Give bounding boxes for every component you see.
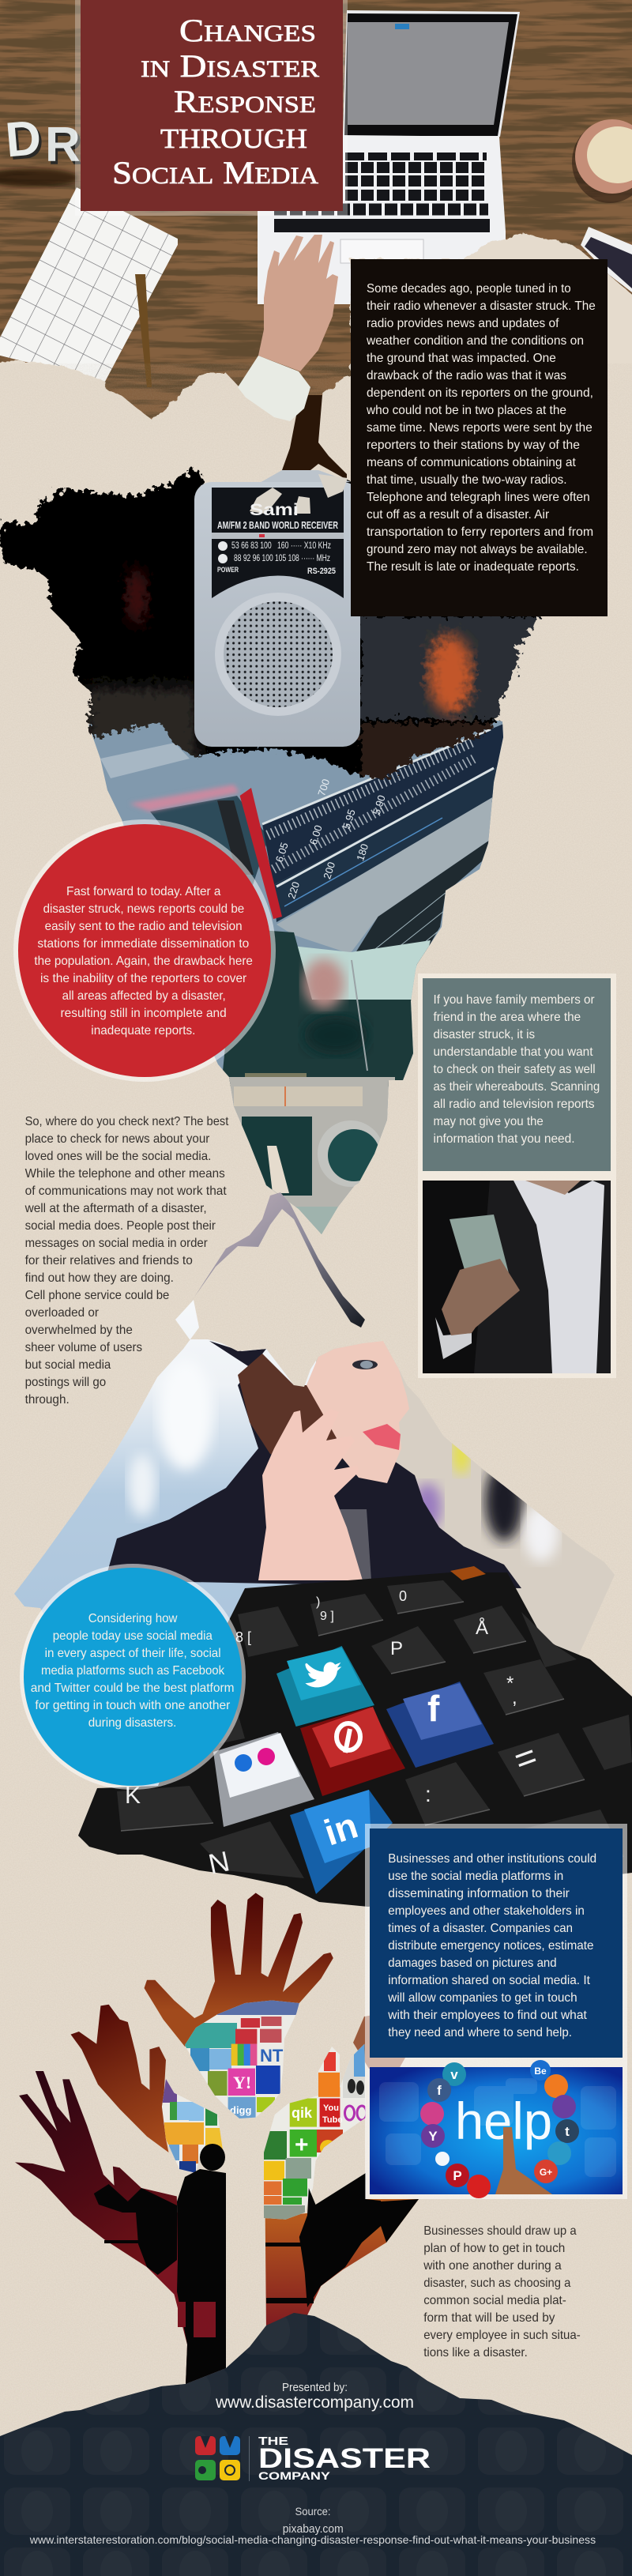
panel: businesses and institutions: damages based on pictures and xyxy=(388,1956,557,1970)
key rims xyxy=(121,1602,585,1831)
panel: radio history: The result is late or inadequate reports. xyxy=(367,560,579,574)
panel: red circle, fast forward: all areas affected by a disaster, xyxy=(62,989,226,1003)
panel: family members: all radio and television reports xyxy=(433,1098,595,1111)
panel: radio history: their radio whenever a disaster struck. The xyxy=(367,299,596,313)
key letters: = xyxy=(509,1734,543,1780)
illustration: reaching hands xyxy=(15,1893,419,2384)
panel: businesses and institutions: they need and where to send help. xyxy=(388,2026,572,2039)
panel: family members xyxy=(418,974,616,1378)
panel: businesses and institutions: times of a disaster. Companies can xyxy=(388,1922,573,1935)
icon letters: Be xyxy=(534,2066,547,2077)
text: businesses should draw up a plan: every employee in such situa- xyxy=(423,2329,581,2342)
panel: family members: understandable that you want xyxy=(433,1045,593,1059)
panel: businesses and institutions: Businesses and other institutions could xyxy=(388,1852,596,1866)
presented by xyxy=(215,2381,414,2412)
photo: wooden desk with laptop xyxy=(0,0,632,431)
title: Changes xyxy=(179,12,316,49)
icon letters: Y xyxy=(428,2129,438,2144)
key letters: ) xyxy=(316,1595,320,1609)
source: Source: xyxy=(295,2505,330,2518)
dial numbers: 5.95 xyxy=(340,808,358,830)
radio labels: Sami xyxy=(250,501,299,519)
icon letters: v xyxy=(450,2067,458,2082)
photo: keyboard with social media keys xyxy=(78,1566,632,1907)
logo xyxy=(195,2435,431,2482)
panel: radio history: Some decades ago, people tuned in to xyxy=(367,282,571,296)
text: businesses should draw up a plan: common social media plat- xyxy=(423,2294,566,2307)
footer mountain xyxy=(0,2307,632,2576)
panel: radio history: transportation to ferry reporters and from xyxy=(367,525,593,539)
radio labels xyxy=(212,501,344,576)
photo: woman on phone xyxy=(14,1300,615,1787)
key letters: : xyxy=(425,1782,431,1806)
text: where to check next: postings will go xyxy=(25,1376,106,1389)
panel: family members: friend in the area where the xyxy=(433,1011,581,1024)
panel: businesses and institutions xyxy=(365,1824,627,2199)
presented by: www.disastercompany.com xyxy=(215,2393,414,2412)
panel: radio history: who could not be in two places at the xyxy=(366,404,566,417)
icon letters xyxy=(428,2066,570,2183)
icon tile labels xyxy=(231,2050,342,2151)
text: businesses should draw up a plan: disaster, such as choosing a xyxy=(423,2277,570,2290)
panel: radio history: same time. News reports were sent by the xyxy=(367,421,592,435)
radio labels: AM/FM 2 BAND WORLD RECEIVER xyxy=(217,519,338,531)
photo: help with social media icons: help xyxy=(455,2092,552,2150)
panel: family members: disaster struck, it is xyxy=(433,1028,535,1041)
icon tile labels: digg xyxy=(230,2104,251,2116)
key letters: K xyxy=(125,1783,141,1809)
panel: businesses and institutions: distribute emergency notices, estimate xyxy=(388,1939,594,1953)
photo letters: R xyxy=(45,118,81,172)
photo: help with social media icons xyxy=(370,2060,623,2198)
photo letters xyxy=(3,111,83,175)
dial numbers: 180 xyxy=(354,842,371,862)
presented by: Presented by: xyxy=(282,2381,348,2394)
text: businesses should draw up a plan: form that will be used by xyxy=(423,2311,555,2325)
panel: blue circle, social media use: for getting in touch with one another xyxy=(35,1699,231,1712)
dial numbers: 6.05 xyxy=(273,841,291,864)
panel: businesses and institutions: with their employees to find out what xyxy=(387,2009,587,2022)
dial numbers: 5.90 xyxy=(371,793,388,816)
key letters: * xyxy=(506,1673,514,1694)
dial numbers: 200 xyxy=(321,861,337,880)
dial numbers: 220 xyxy=(285,880,302,900)
icon letters: P xyxy=(453,2168,462,2183)
text: where to check next: but social media xyxy=(25,1358,111,1372)
panel: businesses and institutions: employees and other stakeholders in xyxy=(388,1904,585,1918)
silhouette figures xyxy=(94,2144,419,2384)
icon letters: f xyxy=(437,2083,442,2098)
panel: radio history: that time, usually the two-way radios. xyxy=(367,473,567,487)
key: linkedin xyxy=(290,1790,393,1894)
key: pinterest xyxy=(300,1707,405,1796)
panel: blue circle, social media use: people today use social media xyxy=(53,1629,213,1643)
key: linkedin: in xyxy=(319,1804,363,1854)
text: where to check next: of communications may not work that xyxy=(25,1184,227,1198)
key letters: P xyxy=(390,1638,403,1659)
icon tile labels: NT xyxy=(260,2046,284,2066)
text: where to check next: well at the aftermath of a disaster, xyxy=(24,1202,207,1215)
text: where to check next: While the telephone and other means xyxy=(25,1167,225,1181)
text: businesses should draw up a plan: Businesses should draw up a xyxy=(423,2224,577,2238)
panel: red circle, fast forward: inadequate reports. xyxy=(91,1024,195,1038)
panel: radio history xyxy=(351,259,608,616)
panel: blue circle, social media use: media platforms such as Facebook xyxy=(41,1664,225,1678)
photo: mountain sliver xyxy=(190,1192,365,1328)
panel: red circle, fast forward: is the inability of the reporters to cover xyxy=(40,972,247,985)
text: where to check next: social media does. People post their xyxy=(25,1219,216,1233)
radio labels: 88 92 96 100 105 108 ······ MHz xyxy=(234,552,330,563)
panel: radio history: reporters to their stations by way of the xyxy=(367,439,580,452)
title: Social Media xyxy=(112,154,318,191)
radio labels: POWER xyxy=(217,566,239,574)
panel: red circle, fast forward: stations for immediate dissemination to xyxy=(37,937,249,951)
panel: businesses and institutions: disseminating information to their xyxy=(388,1887,570,1900)
logo: DISASTER xyxy=(258,2443,431,2474)
panel: red circle, fast forward: Fast forward to today. After a xyxy=(66,885,220,898)
text: where to check next: messages on social media in order xyxy=(25,1237,208,1250)
panel: blue circle, social media use: in every aspect of their life, social xyxy=(45,1647,221,1660)
text: where to check next: for their relatives and friends to xyxy=(25,1254,193,1267)
text: businesses should draw up a plan: tions like a disaster. xyxy=(423,2346,528,2359)
photo letters: R xyxy=(47,121,83,175)
key letters: , xyxy=(512,1687,517,1708)
text: where to check next: overloaded or xyxy=(25,1306,100,1320)
key letters: N xyxy=(205,1844,232,1881)
photo: man holding smartphone xyxy=(423,1181,611,1373)
panel: businesses and institutions: use the social media platforms in xyxy=(388,1870,563,1883)
panel: radio history: weather condition and the conditions on xyxy=(366,334,584,348)
icon tile labels: + xyxy=(295,2132,309,2158)
panel: blue circle, social media use: during disasters. xyxy=(88,1716,176,1730)
key letters: 0 xyxy=(399,1588,407,1604)
key: flickr xyxy=(213,1732,314,1827)
text: where to check next: Cell phone service could be xyxy=(25,1289,169,1302)
photo: tuner and boombox xyxy=(88,721,503,1234)
panel: radio history: ground zero may not always be available. xyxy=(367,543,588,556)
dial numbers xyxy=(273,778,388,900)
panel: radio history: drawback of the radio was that it was xyxy=(367,369,566,382)
panel: businesses and institutions: information shared on social media. It xyxy=(388,1974,590,1987)
panel: family members: as their whereabouts. Scanning xyxy=(433,1080,600,1094)
text: businesses should draw up a plan: with one another during a xyxy=(423,2259,562,2273)
logo: COMPANY xyxy=(258,2469,331,2482)
title: in Disaster xyxy=(141,47,319,85)
panel: radio history: dependent on its reporters on the ground, xyxy=(367,386,593,400)
icon tile labels: Tube xyxy=(322,2115,342,2125)
title xyxy=(75,0,348,216)
panel: family members: may not give you the xyxy=(433,1115,544,1128)
source xyxy=(29,2505,596,2546)
panel: blue circle, social media use xyxy=(20,1564,246,1790)
panel: businesses and institutions: will allow companies to get in touch xyxy=(387,1991,577,2005)
panel: family members: If you have family members or xyxy=(433,993,595,1007)
text: where to check next: sheer volume of users xyxy=(25,1341,142,1354)
text: where to check next: place to check for news about your xyxy=(25,1132,210,1146)
source: pixabay.com xyxy=(283,2522,344,2536)
panel: radio history: the ground that was impacted. One xyxy=(367,352,556,365)
text: businesses should draw up a plan: plan of how to get in touch xyxy=(423,2242,565,2255)
panel: family members: information that you need. xyxy=(433,1132,575,1146)
photo letters: D xyxy=(3,111,43,168)
dial numbers: 6.00 xyxy=(307,823,325,846)
title: through xyxy=(160,112,307,156)
key letters xyxy=(125,1588,543,1881)
icon: portable radio xyxy=(194,470,360,747)
key: facebook xyxy=(386,1682,494,1768)
radio labels: RS-2925 xyxy=(307,567,336,576)
icon tile labels: qik xyxy=(292,2105,313,2121)
key letters: Å xyxy=(476,1617,488,1639)
panel: red circle, fast forward: disaster struck, news reports could be xyxy=(43,902,244,916)
key: facebook: f xyxy=(427,1688,440,1729)
radio labels: 53 66 83 100 160 ····· X10 KHz xyxy=(231,540,331,551)
text: where to check next: So, where do you check next? The best xyxy=(25,1115,229,1128)
photo: hand on laptop xyxy=(238,235,347,480)
text: where to check next: through. xyxy=(25,1393,70,1407)
social media icon sphere xyxy=(158,1995,371,2224)
panel: family members: to check on their safety as well xyxy=(433,1063,596,1076)
panel: radio history: Telephone and telegraph lines were often xyxy=(367,491,590,504)
panel: radio history: cut off as a result of a disaster. Air xyxy=(367,508,550,522)
icon tile labels: You xyxy=(323,2103,339,2113)
panel: red circle, fast forward xyxy=(13,819,276,1082)
source: www.interstaterestoration.com/blog/social-media-changing-disaster-response-find-out-what-it-means-your-business xyxy=(29,2533,596,2546)
icon letters: G+ xyxy=(540,2167,552,2178)
dial numbers: 700 xyxy=(315,778,332,797)
text: businesses should draw up a plan xyxy=(423,2224,581,2359)
photo letters: D xyxy=(6,114,46,171)
key letters: 8 [ xyxy=(235,1629,251,1645)
title: Response xyxy=(174,83,316,120)
panel: red circle, fast forward: resulting still in incomplete and xyxy=(60,1007,227,1020)
text: where to check next xyxy=(24,1115,229,1407)
icon tile labels: Y! xyxy=(233,2073,251,2092)
panel: blue circle, social media use: Considering how xyxy=(88,1612,178,1625)
panel: radio history: radio provides news and updates of xyxy=(367,317,559,330)
text: where to check next: overwhelmed by the xyxy=(25,1324,133,1337)
photo: dark silhouette behind radio xyxy=(0,466,553,786)
key: twitter xyxy=(276,1646,374,1727)
panel: blue circle, social media use: and Twitter could be the best platform xyxy=(31,1682,235,1695)
text: where to check next: find out how they are doing. xyxy=(25,1271,174,1285)
logo: THE xyxy=(258,2435,288,2448)
panel: red circle, fast forward: easily sent to the radio and television xyxy=(45,920,243,933)
key letters: 9 ] xyxy=(320,1610,334,1623)
text: where to check next: loved ones will be the social media. xyxy=(25,1150,211,1163)
panel: red circle, fast forward: the population. Again, the drawback here xyxy=(34,955,253,968)
panel: radio history: means of communications obtaining at xyxy=(367,456,576,469)
icon letters: t xyxy=(565,2124,570,2139)
